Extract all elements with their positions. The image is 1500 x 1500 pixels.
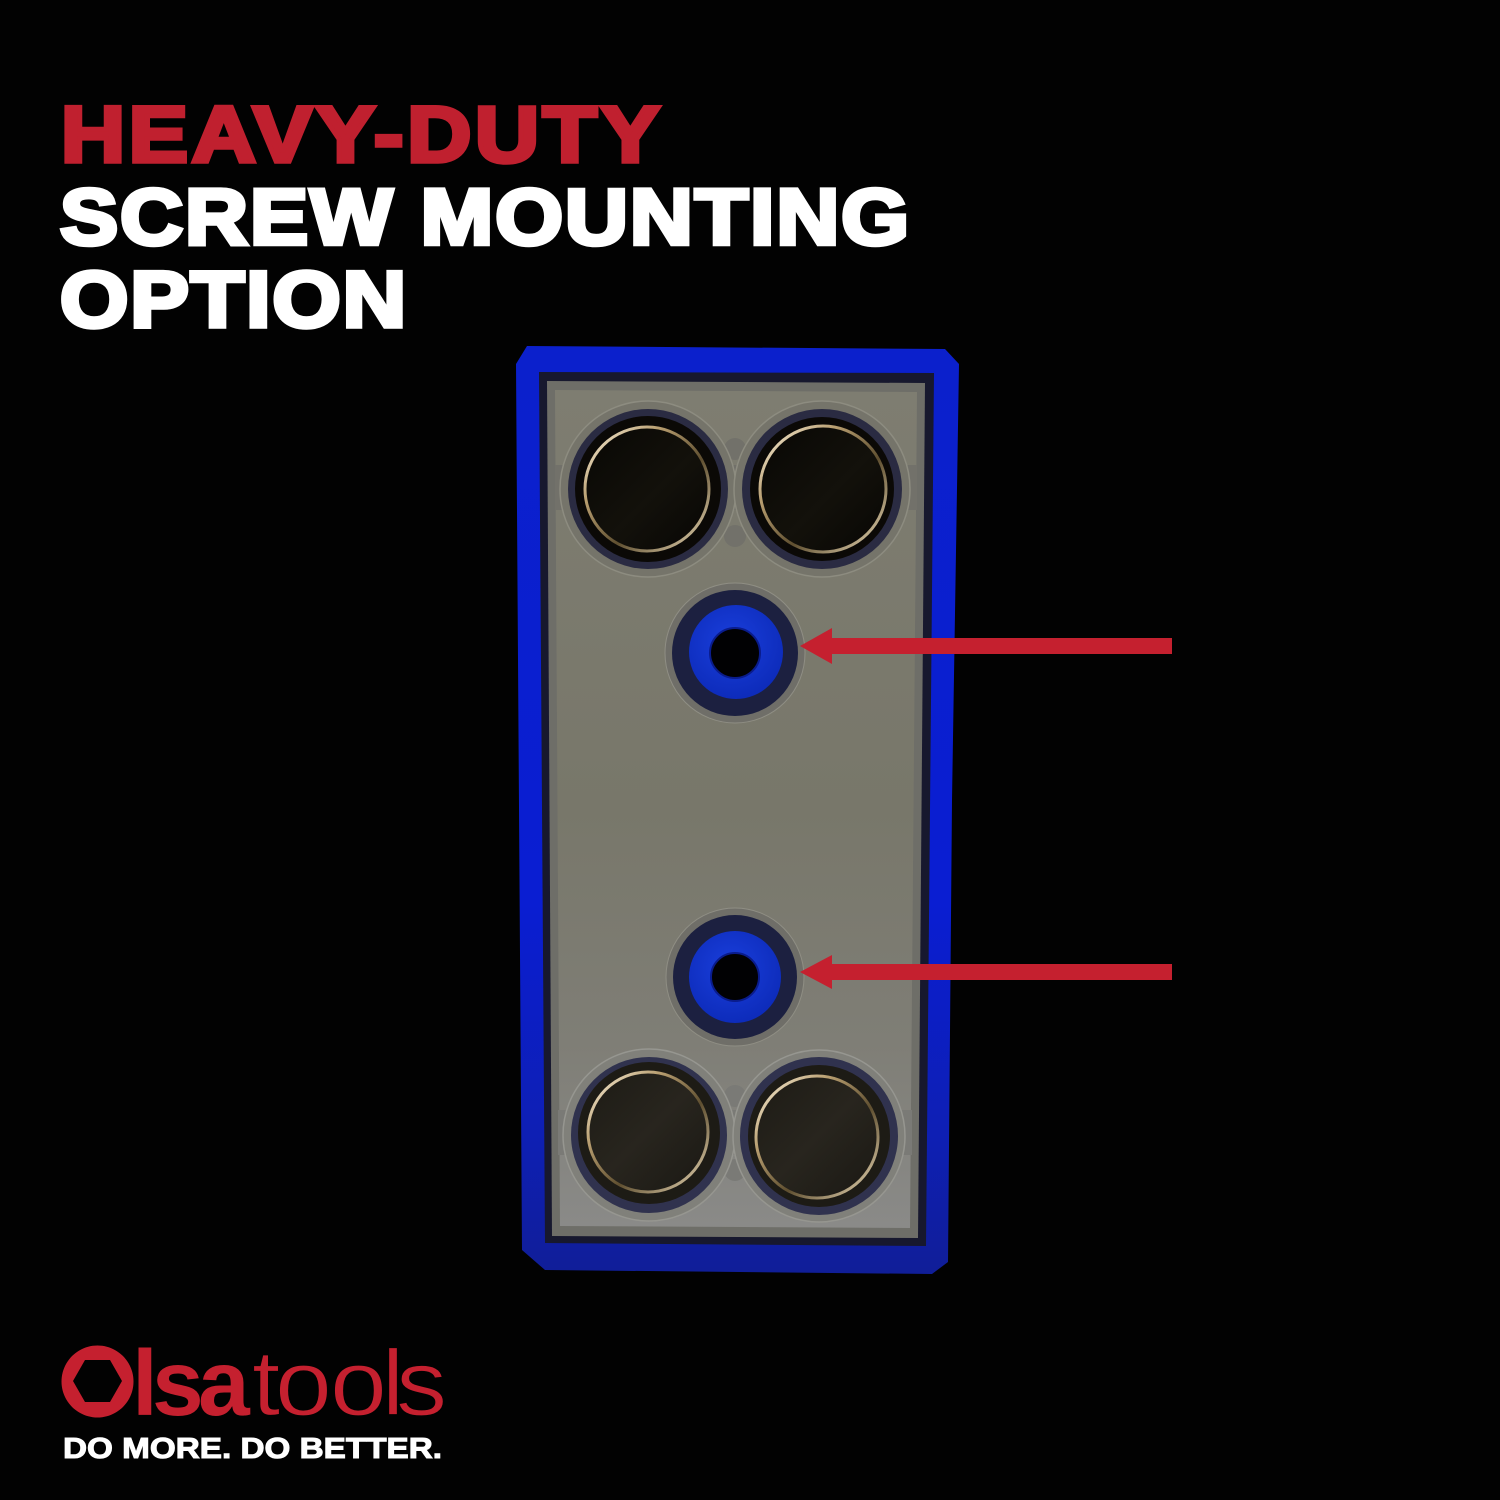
blue outer frame (516, 346, 959, 1274)
icon: hex socket O (62, 1346, 134, 1418)
magnet: top left (560, 401, 736, 577)
logo: Olsatools (62, 1331, 447, 1435)
screw hole: bottom (666, 908, 804, 1046)
dark inner recess (539, 372, 934, 1246)
tagline: DO MORE. DO BETTER. (63, 1433, 442, 1465)
title line: option: OPTION (60, 256, 406, 343)
magnet: bottom left (563, 1049, 735, 1221)
product: blue magnetic mounting plate (516, 346, 959, 1274)
grey plate (547, 381, 925, 1238)
title line: heavy-duty: HEAVY-DUTY (61, 90, 660, 178)
magnet: top right (734, 401, 910, 577)
screw hole: top (665, 583, 805, 723)
magnet: bottom right (733, 1050, 905, 1222)
arrow: top screw hole (800, 628, 1172, 664)
title line: screw mounting: SCREW MOUNTING (60, 173, 909, 261)
title (60, 90, 909, 343)
arrow: bottom screw hole (800, 955, 1172, 989)
wordmark bold part: lsa (132, 1331, 251, 1435)
wordmark light part: tools (252, 1331, 447, 1435)
